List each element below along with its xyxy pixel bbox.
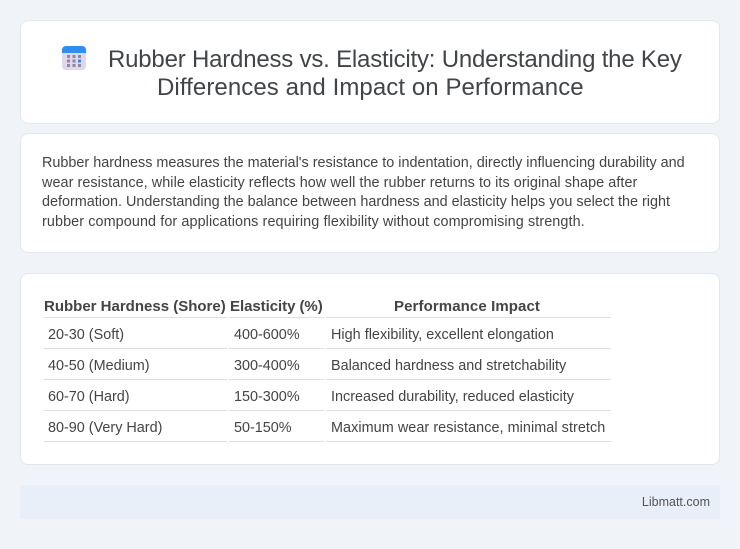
table row: hard: Increased durability, reduced elasticity xyxy=(331,389,574,405)
table header: Rubber Hardness (Shore) xyxy=(44,298,226,315)
table row: medium xyxy=(44,358,611,380)
title: Differences and Impact on Performance xyxy=(157,74,584,101)
header panel xyxy=(20,20,720,124)
table row: medium: 300-400% xyxy=(234,358,300,374)
table row: very hard: 80-90 (Very Hard) xyxy=(48,420,162,436)
summary text: rubber compound for applications requiring flexibility without compromising strength. xyxy=(42,214,585,230)
table row: soft: 20-30 (Soft) xyxy=(48,327,124,343)
panel: summary paragraph xyxy=(20,133,720,253)
table header: Elasticity (%) xyxy=(230,298,323,315)
table header: Performance Impact xyxy=(394,298,540,315)
table row: soft xyxy=(44,327,611,349)
table row: hard: 150-300% xyxy=(234,389,300,405)
table header xyxy=(44,298,611,318)
footer bar xyxy=(20,485,720,519)
summary text: deformation. Understanding the balance between hardness and elasticity helps you select the right xyxy=(42,194,670,210)
footer credit: Libmatt.com xyxy=(642,495,710,509)
table row: very hard: Maximum wear resistance, minimal stretch xyxy=(331,420,605,436)
table row: medium: Balanced hardness and stretchability xyxy=(331,358,566,374)
title xyxy=(108,46,682,101)
table row: soft: 400-600% xyxy=(234,327,300,343)
summary text xyxy=(42,155,685,230)
summary text: wear resistance, while elasticity reflects how well the rubber returns to its original shape after xyxy=(42,175,637,191)
table row: hard: 60-70 (Hard) xyxy=(48,389,130,405)
table row: medium: 40-50 (Medium) xyxy=(48,358,150,374)
table row: soft: High flexibility, excellent elongation xyxy=(331,327,554,343)
table row: very hard: 50-150% xyxy=(234,420,292,436)
title: Rubber Hardness vs. Elasticity: Understanding the Key xyxy=(108,46,682,73)
summary text: Rubber hardness measures the material's resistance to indentation, directly influencing durability and xyxy=(42,155,685,171)
table row: very hard xyxy=(44,420,611,442)
icon: calendar xyxy=(62,46,86,70)
table row: hard xyxy=(44,389,611,411)
panel: comparison table xyxy=(20,273,720,465)
